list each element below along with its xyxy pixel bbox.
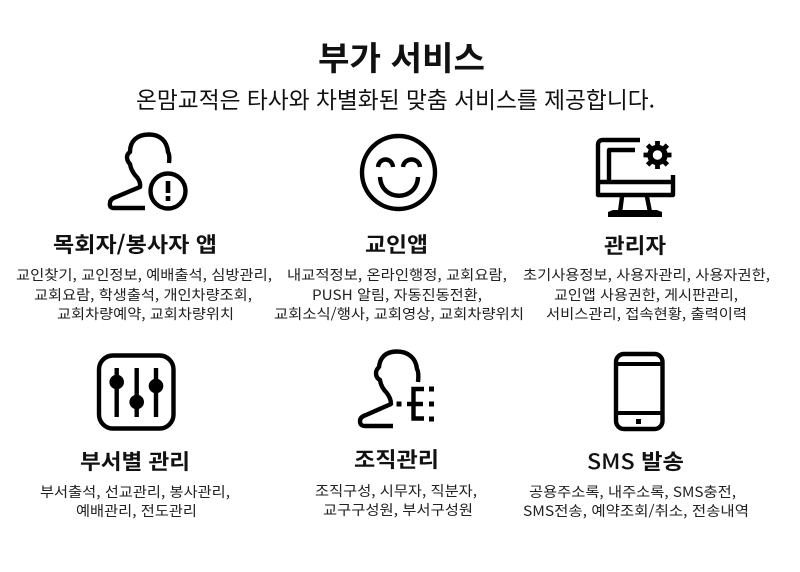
icon: sliders (99, 356, 174, 428)
description: 교인찾기, 교인정보, 예배출석, 심방관리, (16, 265, 272, 285)
description: 교회요람, 학생출석, 개인차량조회, (34, 285, 252, 305)
description: 내교적정보, 온라인행정, 교회요람, (287, 265, 507, 285)
icon: smartphone (616, 354, 662, 429)
description: 조직구성, 시무자, 직분자, (315, 481, 477, 501)
panel: administrator (523, 140, 770, 324)
description: 예배관리, 전도관리 (76, 501, 197, 521)
panel: SMS sending (523, 354, 749, 521)
icon: monitor with gear (598, 140, 673, 217)
description: PUSH 알림, 자동진동전환, (312, 285, 482, 305)
heading: 교인앱 (365, 229, 428, 259)
description: SMS전송, 예약조회/취소, 전송내역 (523, 501, 749, 521)
panel: organization management (315, 352, 477, 520)
panel: pastor and volunteer app (16, 134, 272, 324)
panel: member app (274, 136, 524, 324)
description: 교회차량예약, 교회차량위치 (57, 304, 234, 324)
heading: 목회자/봉사자 앱 (53, 229, 217, 259)
icon: person with org chart (360, 352, 434, 426)
description (16, 265, 272, 324)
description (315, 481, 477, 520)
description (274, 265, 524, 324)
heading: 조직관리 (354, 444, 439, 474)
description: 서비스관리, 접속현황, 출력이력 (546, 304, 747, 324)
description: 교구구성원, 부서구성원 (323, 500, 473, 520)
description: 초기사용정보, 사용자관리, 사용자권한, (523, 265, 770, 285)
description: 교회소식/행사, 교회영상, 교회차량위치 (274, 304, 524, 324)
description (40, 482, 230, 521)
description: 교인앱 사용권한, 게시판관리, (554, 285, 738, 305)
icon: person with alert (110, 134, 186, 208)
heading: 관리자 (604, 230, 666, 260)
heading: 부서별 관리 (80, 446, 190, 476)
subtitle: 온맘교적은 타사와 차별화된 맞춤 서비스를 제공합니다. (136, 81, 655, 115)
panel: department management (40, 356, 230, 521)
heading: SMS 발송 (587, 446, 684, 476)
description: 부서출석, 선교관리, 봉사관리, (40, 482, 230, 502)
title: 부가 서비스 (318, 32, 485, 80)
description (523, 482, 749, 521)
description: 공용주소록, 내주소록, SMS충전, (529, 482, 736, 502)
description (523, 265, 770, 324)
icon: smiling face (362, 136, 435, 209)
